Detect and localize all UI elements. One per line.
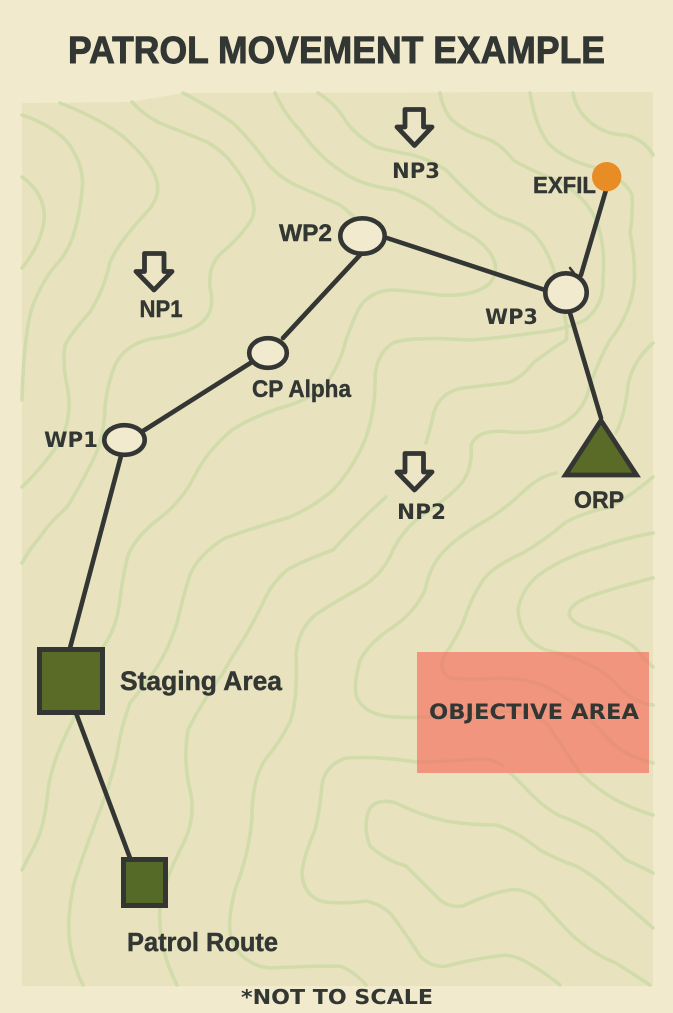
patrol route label: Patrol Route [127, 929, 278, 957]
NP1 label: NP1 [140, 296, 182, 323]
WP3 label: WP3 [485, 305, 538, 329]
waypoint WP1 [104, 425, 145, 455]
patrol route marker [124, 860, 166, 906]
footnote: *NOT TO SCALE [241, 985, 433, 1009]
checkpoint CP Alpha [249, 338, 287, 368]
objective area label: OBJECTIVE AREA [429, 700, 640, 724]
WP2 label: WP2 [279, 220, 332, 247]
contour lines showing through objective area [417, 652, 649, 773]
objective area box [417, 652, 649, 773]
WP1 label: WP1 [44, 428, 98, 452]
CP Alpha label: CP Alpha [252, 376, 352, 403]
title: PATROL MOVEMENT EXAMPLE [68, 30, 605, 72]
EXFIL label: EXFIL [533, 172, 596, 198]
patrol route lines [70, 190, 606, 858]
staging area marker [40, 650, 102, 712]
waypoint WP3 [545, 273, 587, 312]
exfil point [592, 162, 621, 191]
staging area label: Staging Area [120, 666, 283, 696]
ORP triangle [566, 420, 636, 475]
icon: NP3 arrow [397, 110, 432, 146]
NP3 label: NP3 [392, 159, 440, 183]
waypoint WP2 [340, 218, 385, 254]
NP2 label: NP2 [397, 500, 446, 524]
icon: NP2 arrow [397, 454, 432, 490]
ORP label: ORP [574, 487, 624, 514]
icon: NP1 arrow [136, 254, 172, 290]
